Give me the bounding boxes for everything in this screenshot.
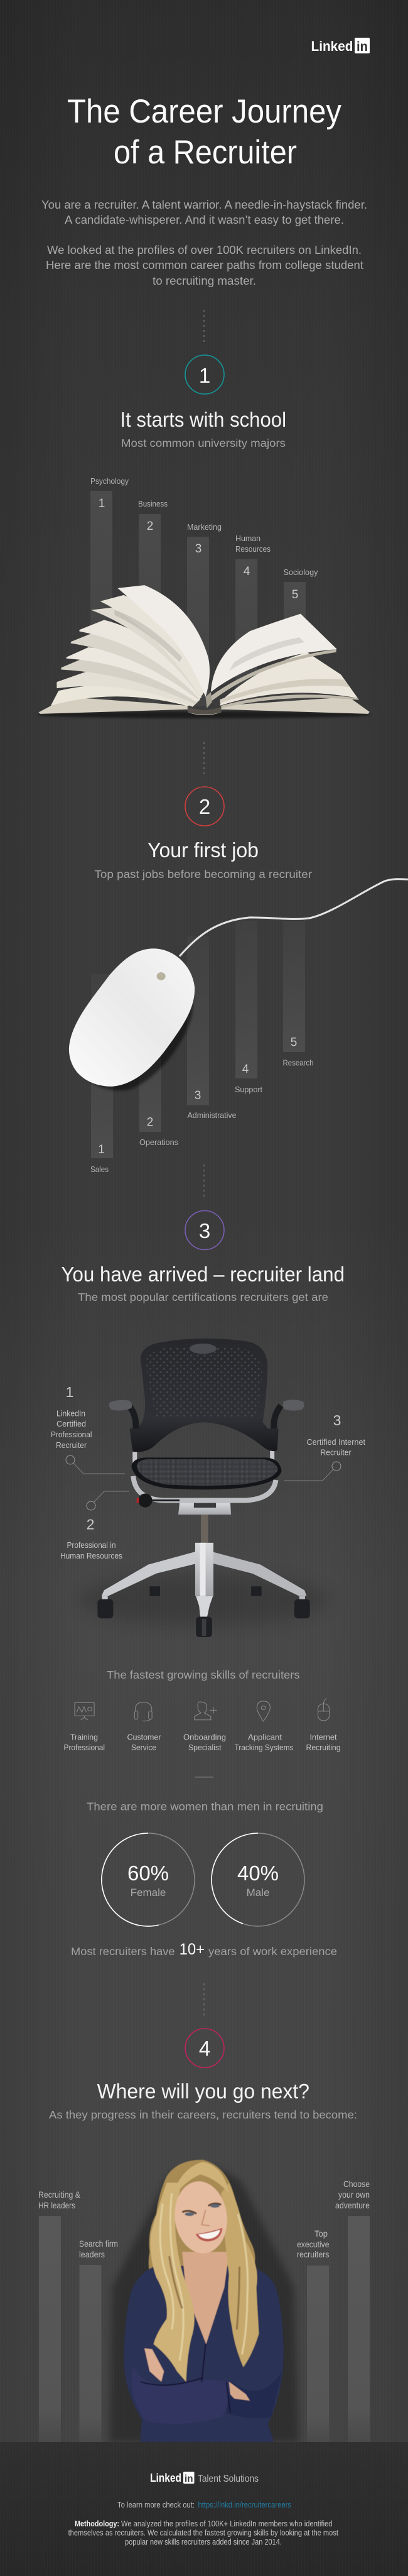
bar chart: past jobs: Support — [235, 1085, 263, 1094]
intro text: Here are the most common career paths from college student — [46, 259, 363, 271]
step badge 4: 4 — [199, 2037, 210, 2060]
bar chart: majors: 4 — [244, 565, 250, 578]
bar chart: past jobs — [90, 921, 314, 1174]
bar chart: next roles: Top — [314, 2228, 328, 2239]
experience stat: Most recruiters have — [71, 1945, 175, 1958]
subheading: The most popular certifications recruiters get are — [78, 1291, 328, 1303]
step badge 1: 1 — [199, 364, 210, 387]
bar chart: past jobs: 4 — [242, 1063, 249, 1076]
learn more link: https://lnkd.in/recruitercareers — [198, 2501, 291, 2509]
skills icons and labels: Training — [70, 1733, 98, 1742]
bar chart: next roles: executive — [297, 2239, 330, 2249]
intro text — [41, 199, 367, 287]
bar chart: majors: 5 — [292, 588, 298, 601]
callout 3: Certified Internet — [306, 1438, 366, 1447]
skills icons and labels: Specialist — [188, 1743, 222, 1752]
learn more link — [117, 2501, 291, 2509]
callout 1: Certified — [56, 1420, 86, 1428]
bar chart: majors — [90, 477, 318, 706]
skills icons and labels: Internet — [310, 1733, 337, 1742]
LinkedIn Talent Solutions logo: in — [185, 2474, 193, 2484]
callout 2: 2 — [87, 1516, 94, 1532]
panel: section 1 school — [38, 355, 371, 718]
skills icons and labels: Customer — [127, 1733, 161, 1742]
bar chart: past jobs: Operations — [139, 1138, 178, 1147]
experience stat: 10+ — [180, 1941, 205, 1958]
methodology: We analyzed the profiles of 100K+ LinkedIn members who identified — [121, 2519, 333, 2528]
methodology: Methodology: — [75, 2519, 119, 2528]
callout 3: 3 — [333, 1412, 341, 1428]
skills icons and labels: Onboarding — [183, 1733, 226, 1742]
skills icons and labels — [64, 1698, 341, 1752]
bar chart: next roles: Recruiting & — [38, 2190, 81, 2200]
icon: headset — [134, 1702, 152, 1721]
callout 3: Recruiter — [320, 1448, 352, 1457]
callout 1: Recruiter — [56, 1441, 87, 1450]
learn more link: To learn more check out: — [117, 2501, 195, 2509]
bar chart: past jobs: Sales — [90, 1165, 109, 1174]
bar chart: majors: Psychology — [90, 477, 129, 486]
skills heading: The fastest growing skills of recruiters — [107, 1669, 300, 1681]
step badge 2: 2 — [199, 795, 210, 818]
callout 2: Professional in — [67, 1541, 116, 1550]
donut chart: female 60%: Female — [131, 1887, 166, 1899]
skills icons and labels: Service — [131, 1743, 156, 1752]
LinkedIn logo: Linked — [311, 38, 353, 54]
skills icons and labels: Tracking Systems — [235, 1743, 294, 1752]
skills icons and labels: Professional — [64, 1743, 105, 1752]
skills icons and labels: Applicant — [248, 1733, 282, 1742]
bar chart: next roles: leaders — [79, 2249, 105, 2259]
methodology: themselves as recruiters. We calculated the fastest growing skills by looking at the most — [68, 2529, 338, 2538]
bar chart: majors: Human — [235, 534, 260, 543]
portrait: smiling woman with arms crossed — [109, 2160, 299, 2442]
step badge 1 — [185, 355, 224, 394]
donut chart: female 60% — [102, 1833, 195, 1926]
bar chart: next roles: your own — [338, 2190, 370, 2200]
callout 2 — [60, 1491, 129, 1560]
heading: It starts with school — [121, 408, 286, 431]
panel: section 3 recruiter land — [51, 1210, 366, 1958]
subheading: Most common university majors — [121, 437, 286, 449]
bar chart: past jobs: 1 — [98, 1143, 105, 1156]
bar chart: next roles: recruiters — [297, 2249, 329, 2259]
panel: section 2 first job — [69, 787, 408, 1174]
title: The Career Journey — [67, 93, 341, 130]
subheading: Top past jobs before becoming a recruiter — [94, 868, 312, 880]
icon: open book — [38, 585, 371, 718]
callout 1: 1 — [66, 1384, 73, 1400]
icon: presentation board — [75, 1703, 94, 1720]
step badge 3: 3 — [199, 1219, 210, 1242]
bar chart: majors: 2 — [147, 520, 153, 533]
panel: header — [41, 38, 370, 287]
bar chart: majors: Resources — [235, 545, 271, 554]
gender heading: There are more women than men in recruiting — [87, 1800, 323, 1813]
bar chart: majors: Marketing — [187, 523, 222, 532]
bar chart: next roles: adventure — [335, 2200, 370, 2210]
LinkedIn Talent Solutions logo: Talent Solutions — [198, 2474, 259, 2484]
donut chart: female 60%: 60% — [127, 1861, 169, 1885]
bar chart: next roles: HR leaders — [38, 2200, 75, 2210]
intro text: We looked at the profiles of over 100K recruiters on LinkedIn. — [47, 244, 362, 256]
icon: computer mouse — [318, 1698, 329, 1721]
icon: office chair — [78, 1339, 330, 1637]
bar chart: majors: Business — [138, 500, 168, 508]
callout 3 — [284, 1412, 366, 1481]
bar chart: past jobs: 5 — [291, 1036, 297, 1050]
icon: mouse — [69, 879, 408, 1090]
step badge 4 — [185, 2029, 224, 2068]
heading: Where will you go next? — [97, 2080, 309, 2103]
heading: You have arrived – recruiter land — [62, 1263, 345, 1286]
panel: footer — [0, 2442, 408, 2576]
icon: add person — [195, 1702, 217, 1720]
donut chart: male 40% — [212, 1833, 304, 1926]
LinkedIn logo: in — [357, 40, 368, 54]
callout 1 — [51, 1384, 125, 1474]
bar chart: next roles — [38, 2179, 370, 2442]
bar chart: past jobs: 2 — [147, 1116, 153, 1129]
callout 2: Human Resources — [60, 1552, 122, 1560]
panel: section 4 what's next — [38, 2029, 370, 2442]
donut chart: male 40%: 40% — [237, 1861, 279, 1885]
bar chart: past jobs: Administrative — [187, 1111, 237, 1120]
methodology: popular new skills recruiters added since Jan 2014. — [125, 2538, 282, 2546]
step badge 3 — [185, 1210, 224, 1249]
step badge 2 — [185, 787, 224, 826]
intro text: A candidate-whisperer. And it wasn’t easy to get there. — [65, 214, 344, 226]
subheading: As they progress in their careers, recruiters tend to become: — [49, 2108, 357, 2121]
experience stat: years of work experience — [208, 1945, 337, 1958]
bar chart: majors: 1 — [99, 497, 105, 510]
intro text: You are a recruiter. A talent warrior. A needle-in-haystack finder. — [41, 199, 367, 211]
bar chart: past jobs: Research — [282, 1058, 314, 1067]
intro text: to recruiting master. — [153, 275, 256, 287]
title — [67, 93, 341, 171]
bar chart: next roles: Choose — [343, 2179, 370, 2189]
methodology — [68, 2519, 338, 2546]
callout 1: LinkedIn — [56, 1409, 85, 1418]
donut chart: male 40%: Male — [247, 1887, 269, 1899]
LinkedIn Talent Solutions logo — [150, 2472, 259, 2484]
bar chart: majors: Sociology — [284, 568, 318, 577]
bar chart: majors: 3 — [195, 542, 201, 556]
skills icons and labels: Recruiting — [306, 1743, 341, 1752]
callout 1: Professional — [51, 1430, 92, 1439]
bar chart: past jobs: 3 — [195, 1089, 201, 1102]
title: of a Recruiter — [114, 134, 297, 171]
LinkedIn Talent Solutions logo: Linked — [150, 2472, 181, 2484]
heading: Your first job — [148, 838, 259, 862]
bar chart: next roles: Search firm — [79, 2239, 118, 2249]
icon: map pin — [257, 1701, 270, 1721]
experience stat — [71, 1941, 337, 1958]
